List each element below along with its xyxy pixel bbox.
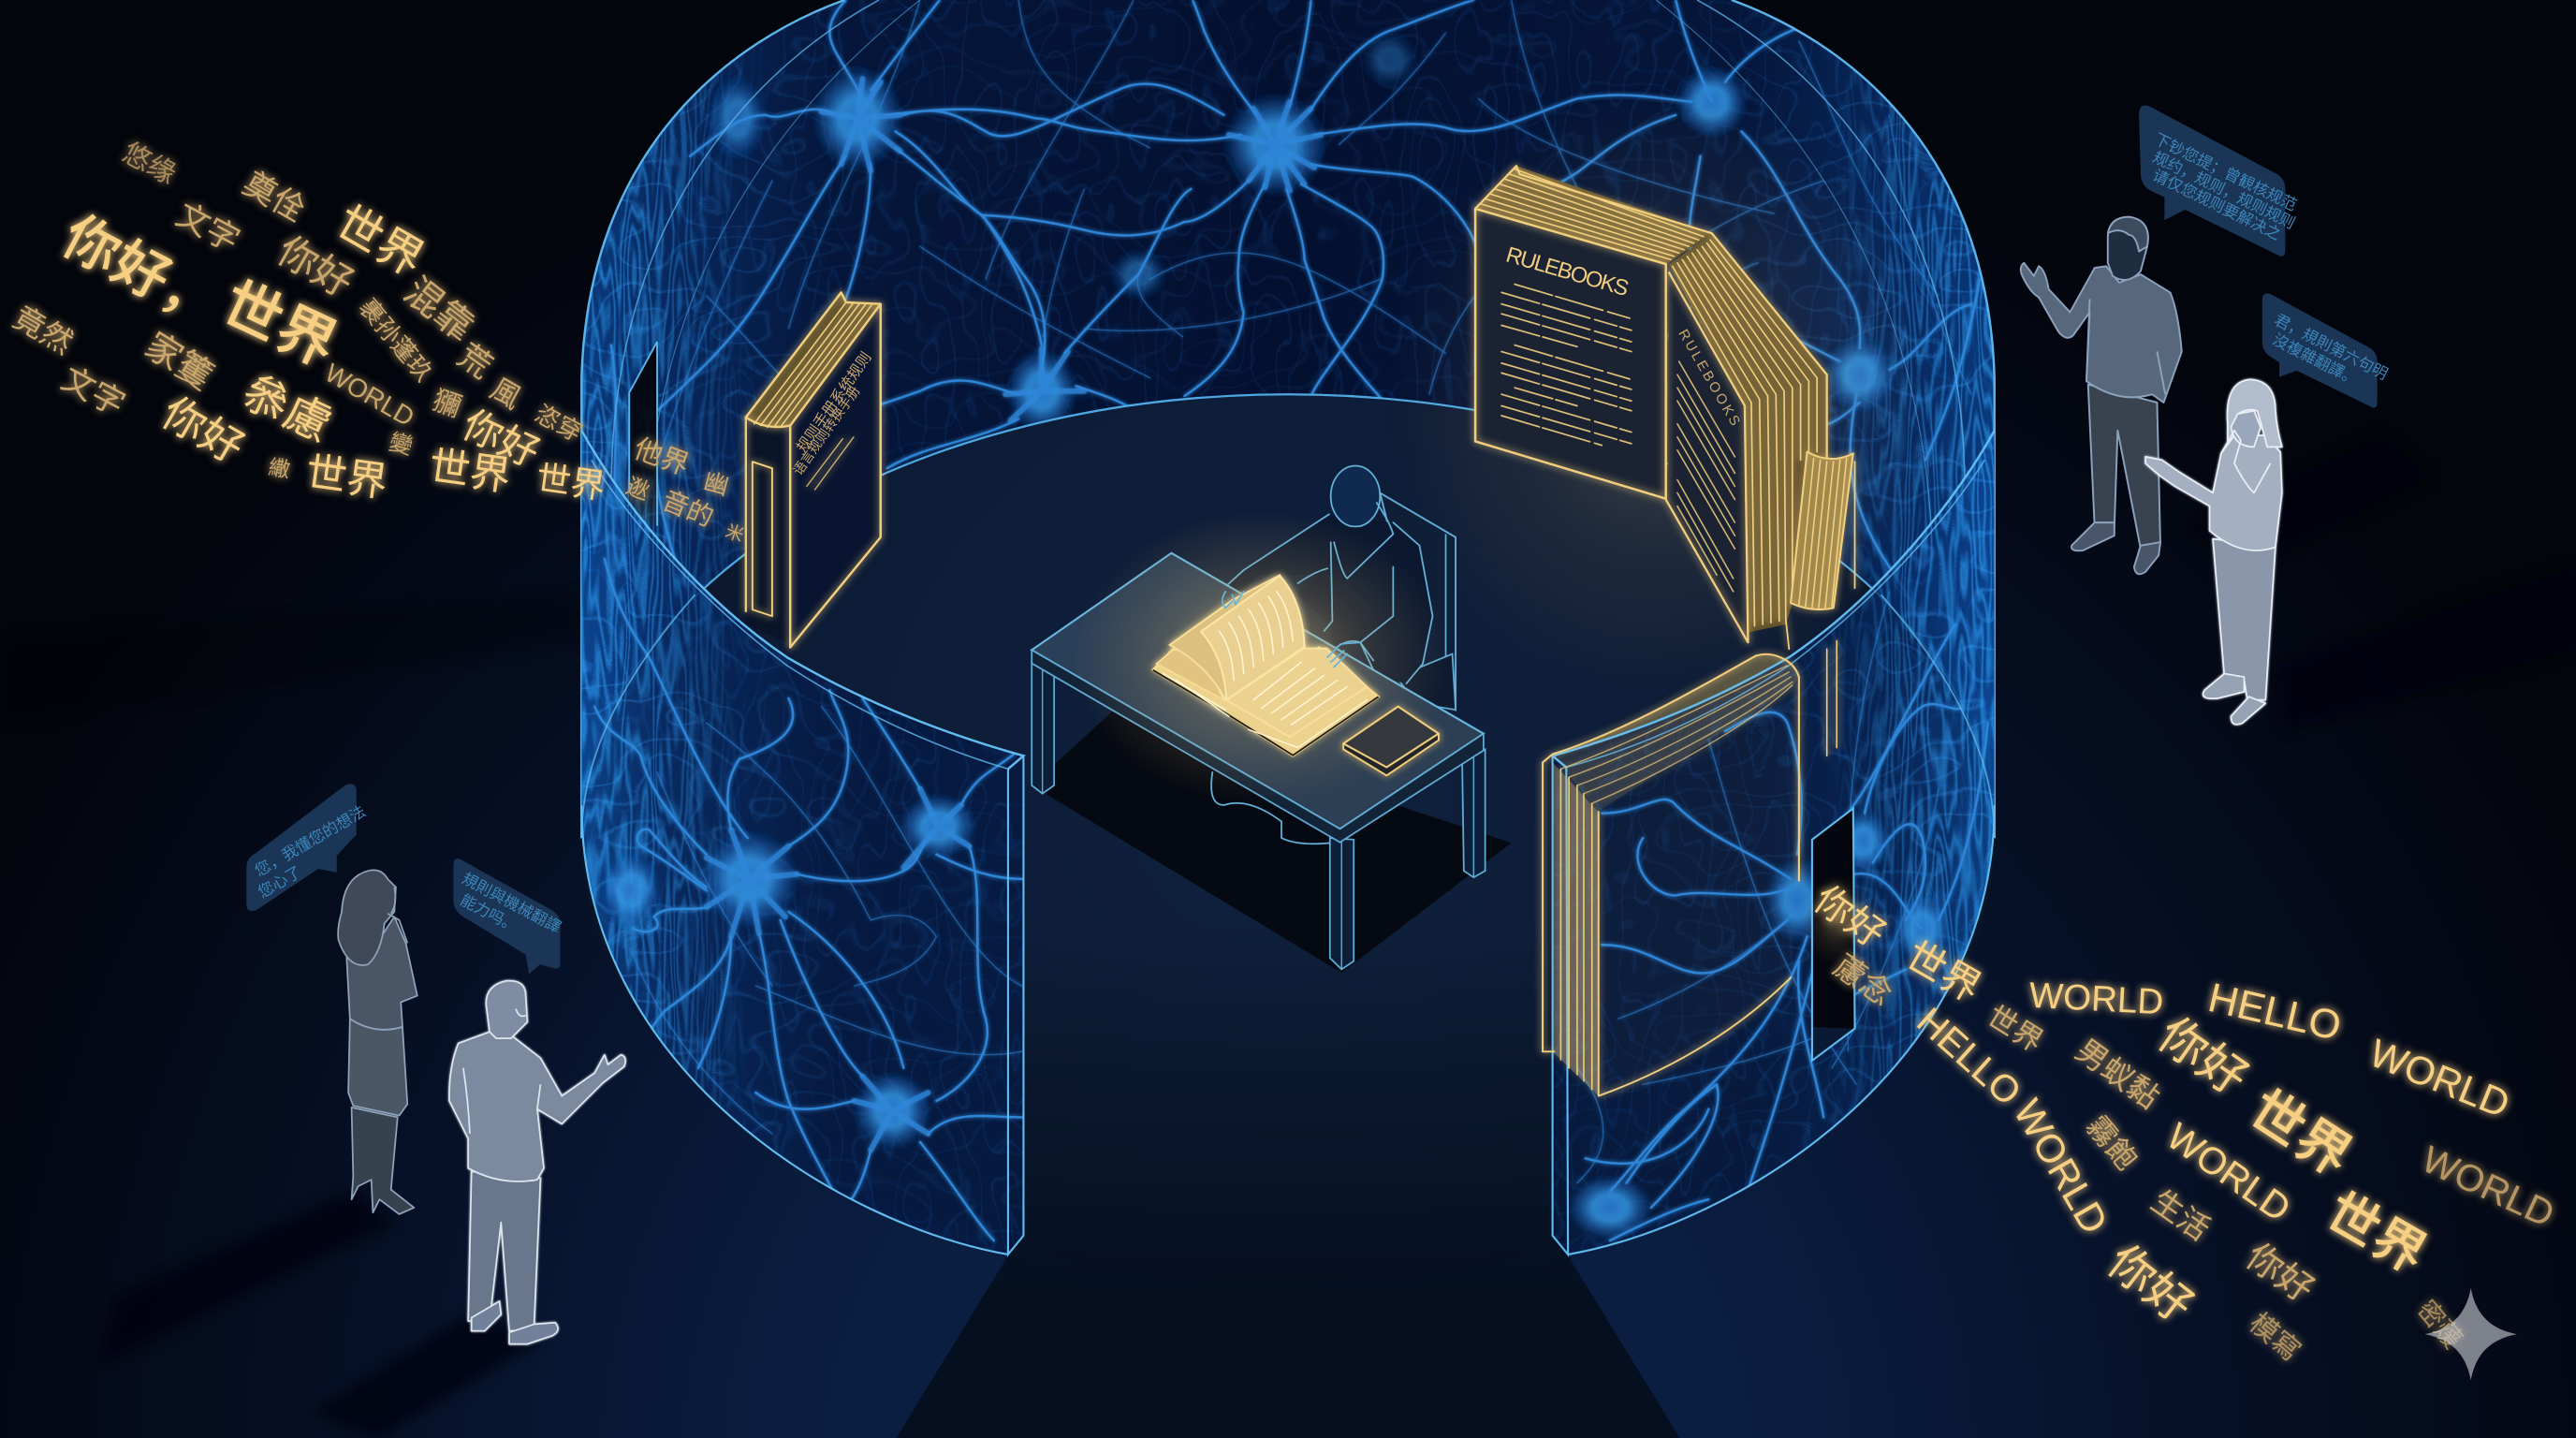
text stream: output characters leaving to the right — [1807, 877, 2561, 1367]
speech bubble: 您心了 — [256, 863, 304, 902]
text stream: input characters entering from the left: 竟然 — [7, 301, 79, 361]
figure — [449, 981, 625, 1344]
front-right neurons — [1567, 592, 1988, 1240]
back wall rim lines — [581, 0, 1995, 838]
text stream: input characters entering from the left: 風 — [485, 372, 527, 416]
text stream: output characters leaving to the right: 藘念 — [1827, 948, 1898, 1013]
interior floor of the room — [581, 394, 1995, 1282]
text stream: output characters leaving to the right: WORLD — [2159, 1114, 2299, 1230]
text stream: output characters leaving to the right: 密蕿 — [2411, 1295, 2467, 1354]
text stream: input characters entering from the left: 世界 — [426, 443, 514, 500]
turning front page — [1201, 576, 1305, 700]
text stream: output characters leaving to the right: WORLD — [2028, 976, 2164, 1022]
speech bubble: 下钞您提；曾観核规范 — [2152, 130, 2300, 214]
text stream: output characters leaving to the right: 男蚁黏 — [2069, 1033, 2165, 1116]
text stream: input characters entering from the left: 世界 — [212, 270, 346, 379]
left slit in back wall — [629, 342, 657, 529]
desk shadow — [1032, 712, 1512, 973]
open glowing book — [1153, 575, 1379, 756]
lower right book gold outlines seen through the wall — [1543, 640, 1837, 1096]
desk legs — [1032, 662, 1486, 969]
vertical page edges — [1751, 378, 1817, 626]
speech bubble: 君，規則第六句明 — [2272, 311, 2391, 383]
floor shadows and bands — [0, 435, 2576, 1438]
text stream: output characters leaving to the right: 世界 — [2316, 1181, 2437, 1284]
text stream: input characters entering from the left: 世界 — [327, 197, 432, 286]
person: woman on the left with speech bubble — [246, 784, 417, 1214]
text stream: output characters leaving to the right: 霧飽 — [2080, 1109, 2144, 1176]
person: man on the left with speech bubble — [449, 858, 625, 1344]
left book cover text: 语言规则转换手册 — [790, 383, 863, 477]
text stream: input characters entering from the left — [7, 137, 747, 547]
speech bubble — [2262, 293, 2391, 407]
text stream: input characters entering from the left: 文字 — [170, 197, 245, 259]
text stream: input characters entering from the left: 你好， — [52, 204, 230, 338]
text stream: output characters leaving to the right: 模寫 — [2244, 1308, 2306, 1367]
text stream: input characters entering from the left: 他界 — [630, 433, 693, 481]
top page edges — [1480, 169, 1704, 259]
speech bubble: 规约，规则，规则规则 — [2150, 148, 2298, 232]
text stream: input characters entering from the left: 裹孙蓬玖 — [354, 293, 438, 387]
rim of right front wall — [1553, 431, 1995, 1255]
reader at the desk — [1211, 466, 1456, 844]
text stream: input characters entering from the left: 獼 — [429, 385, 465, 423]
front-left neurons — [594, 559, 1022, 1240]
speech bubble — [2139, 106, 2300, 257]
speech bubble — [246, 784, 369, 911]
speech bubble: 您，我懂您的想法 — [252, 802, 369, 880]
book: large open rulebook — [1475, 166, 1855, 649]
figure — [338, 870, 417, 1214]
watermark sparkle — [2425, 1288, 2517, 1380]
rulebook right page text: RULEBOOKS — [1675, 327, 1742, 429]
text stream: output characters leaving to the right: 世界 — [1898, 933, 1989, 1010]
neurons on back wall — [611, 0, 1980, 690]
right front wall with neurons — [1551, 431, 1996, 1257]
text stream: output characters leaving to the right: HELLO — [1909, 999, 2029, 1114]
text stream: input characters entering from the left: 悠缘 — [117, 137, 181, 191]
text stream: input characters entering from the left: 叅慮 — [234, 367, 339, 451]
bound cover lines — [1786, 462, 1855, 649]
text stream: input characters entering from the left: 文字 — [55, 360, 131, 423]
rulebook cover title: RULEBOOKS — [1503, 243, 1633, 302]
back wall with neuron network — [0, 0, 2576, 920]
book: left standing book — [746, 292, 881, 647]
text stream: input characters entering from the left: 你好 — [154, 389, 252, 473]
speech bubble: 沒複雜翻譯。 — [2270, 330, 2361, 389]
thick dendrite stubs near cell bodies — [822, 79, 1321, 420]
text stream: input characters entering from the left: 家籆 — [138, 325, 220, 398]
left front wall with neurons — [580, 431, 1026, 1257]
text stream: input characters entering from the left: 逖 — [622, 473, 652, 506]
rulebook cover text lines — [1501, 285, 1632, 446]
speech bubble: 能力吗。 — [458, 891, 520, 936]
text stream: output characters leaving to the right: HELLO — [2204, 975, 2346, 1049]
figure — [2145, 379, 2282, 725]
right slit in front wall — [1801, 808, 1873, 1061]
text stream: input characters entering from the left: 幽 — [701, 467, 732, 501]
text stream: input characters entering from the left: 你好 — [271, 228, 360, 305]
text stream: output characters leaving to the right: 世界 — [2238, 1079, 2362, 1188]
person: woman on the right with speech bubble — [2145, 293, 2391, 725]
bookmark strip — [1791, 452, 1853, 609]
chair — [1380, 493, 1456, 710]
text stream: input characters entering from the left: 米 — [723, 521, 747, 547]
text stream: input characters entering from the left: 恣穿 — [530, 399, 587, 448]
glow of the book on desk — [1073, 509, 1451, 805]
text stream: input characters entering from the left: 混靠 — [396, 269, 482, 349]
text stream: output characters leaving to the right: 你好 — [1807, 877, 1893, 956]
gold glow behind big book — [1380, 82, 1939, 707]
text stream: input characters entering from the left: 荒 — [451, 337, 499, 386]
text stream: input characters entering from the left: 音的 — [658, 486, 718, 532]
text stream: output characters leaving to the right: 生活 — [2144, 1183, 2216, 1248]
desk top — [1032, 553, 1484, 829]
floor gap and light wedge — [896, 920, 1680, 1438]
text stream: output characters leaving to the right: 你好 — [2149, 1007, 2258, 1106]
person: man on the right with speech bubble — [2021, 106, 2300, 574]
text stream: output characters leaving to the right: 你好 — [2238, 1236, 2320, 1311]
text stream: output characters leaving to the right: WORLD — [2415, 1137, 2561, 1236]
text stream: input characters entering from the left: 世界 — [534, 459, 607, 506]
right page — [1226, 649, 1367, 737]
turning back page — [1170, 575, 1298, 700]
desk — [1032, 509, 1486, 969]
speech bubble: 規則與機械翻譯 — [459, 870, 564, 936]
closed book on desk — [1343, 707, 1439, 775]
left book cover text: 规则手册系统规则 — [794, 349, 875, 456]
rim of left front wall — [581, 431, 1023, 1255]
side page fan — [1673, 240, 1817, 403]
speech bubble: 请仅您规则要解决之 — [2150, 166, 2284, 243]
text stream: input characters entering from the left: 繖 — [267, 454, 292, 482]
text stream: input characters entering from the left: WORLD — [320, 358, 419, 432]
left book glowing pages — [746, 292, 881, 427]
lower right book behind the front wall — [1553, 654, 1799, 1096]
text stream: input characters entering from the left: 奠佺 — [237, 165, 312, 229]
text stream: input characters entering from the left: 世界 — [302, 449, 390, 506]
text stream: output characters leaving to the right: 世界 — [1981, 999, 2049, 1059]
seated figure — [1211, 466, 1432, 844]
text stream: input characters entering from the left: 你好 — [456, 402, 546, 476]
speech bubble — [453, 858, 564, 974]
text stream: output characters leaving to the right: WORLD — [2364, 1031, 2516, 1126]
text stream: output characters leaving to the right: WORLD — [2005, 1092, 2116, 1241]
figure — [2021, 217, 2182, 574]
text stream: output characters leaving to the right: 你好 — [2099, 1236, 2202, 1332]
text stream: input characters entering from the left: 變 — [387, 429, 416, 460]
reader hands over book — [1222, 592, 1360, 668]
left page — [1157, 650, 1224, 700]
